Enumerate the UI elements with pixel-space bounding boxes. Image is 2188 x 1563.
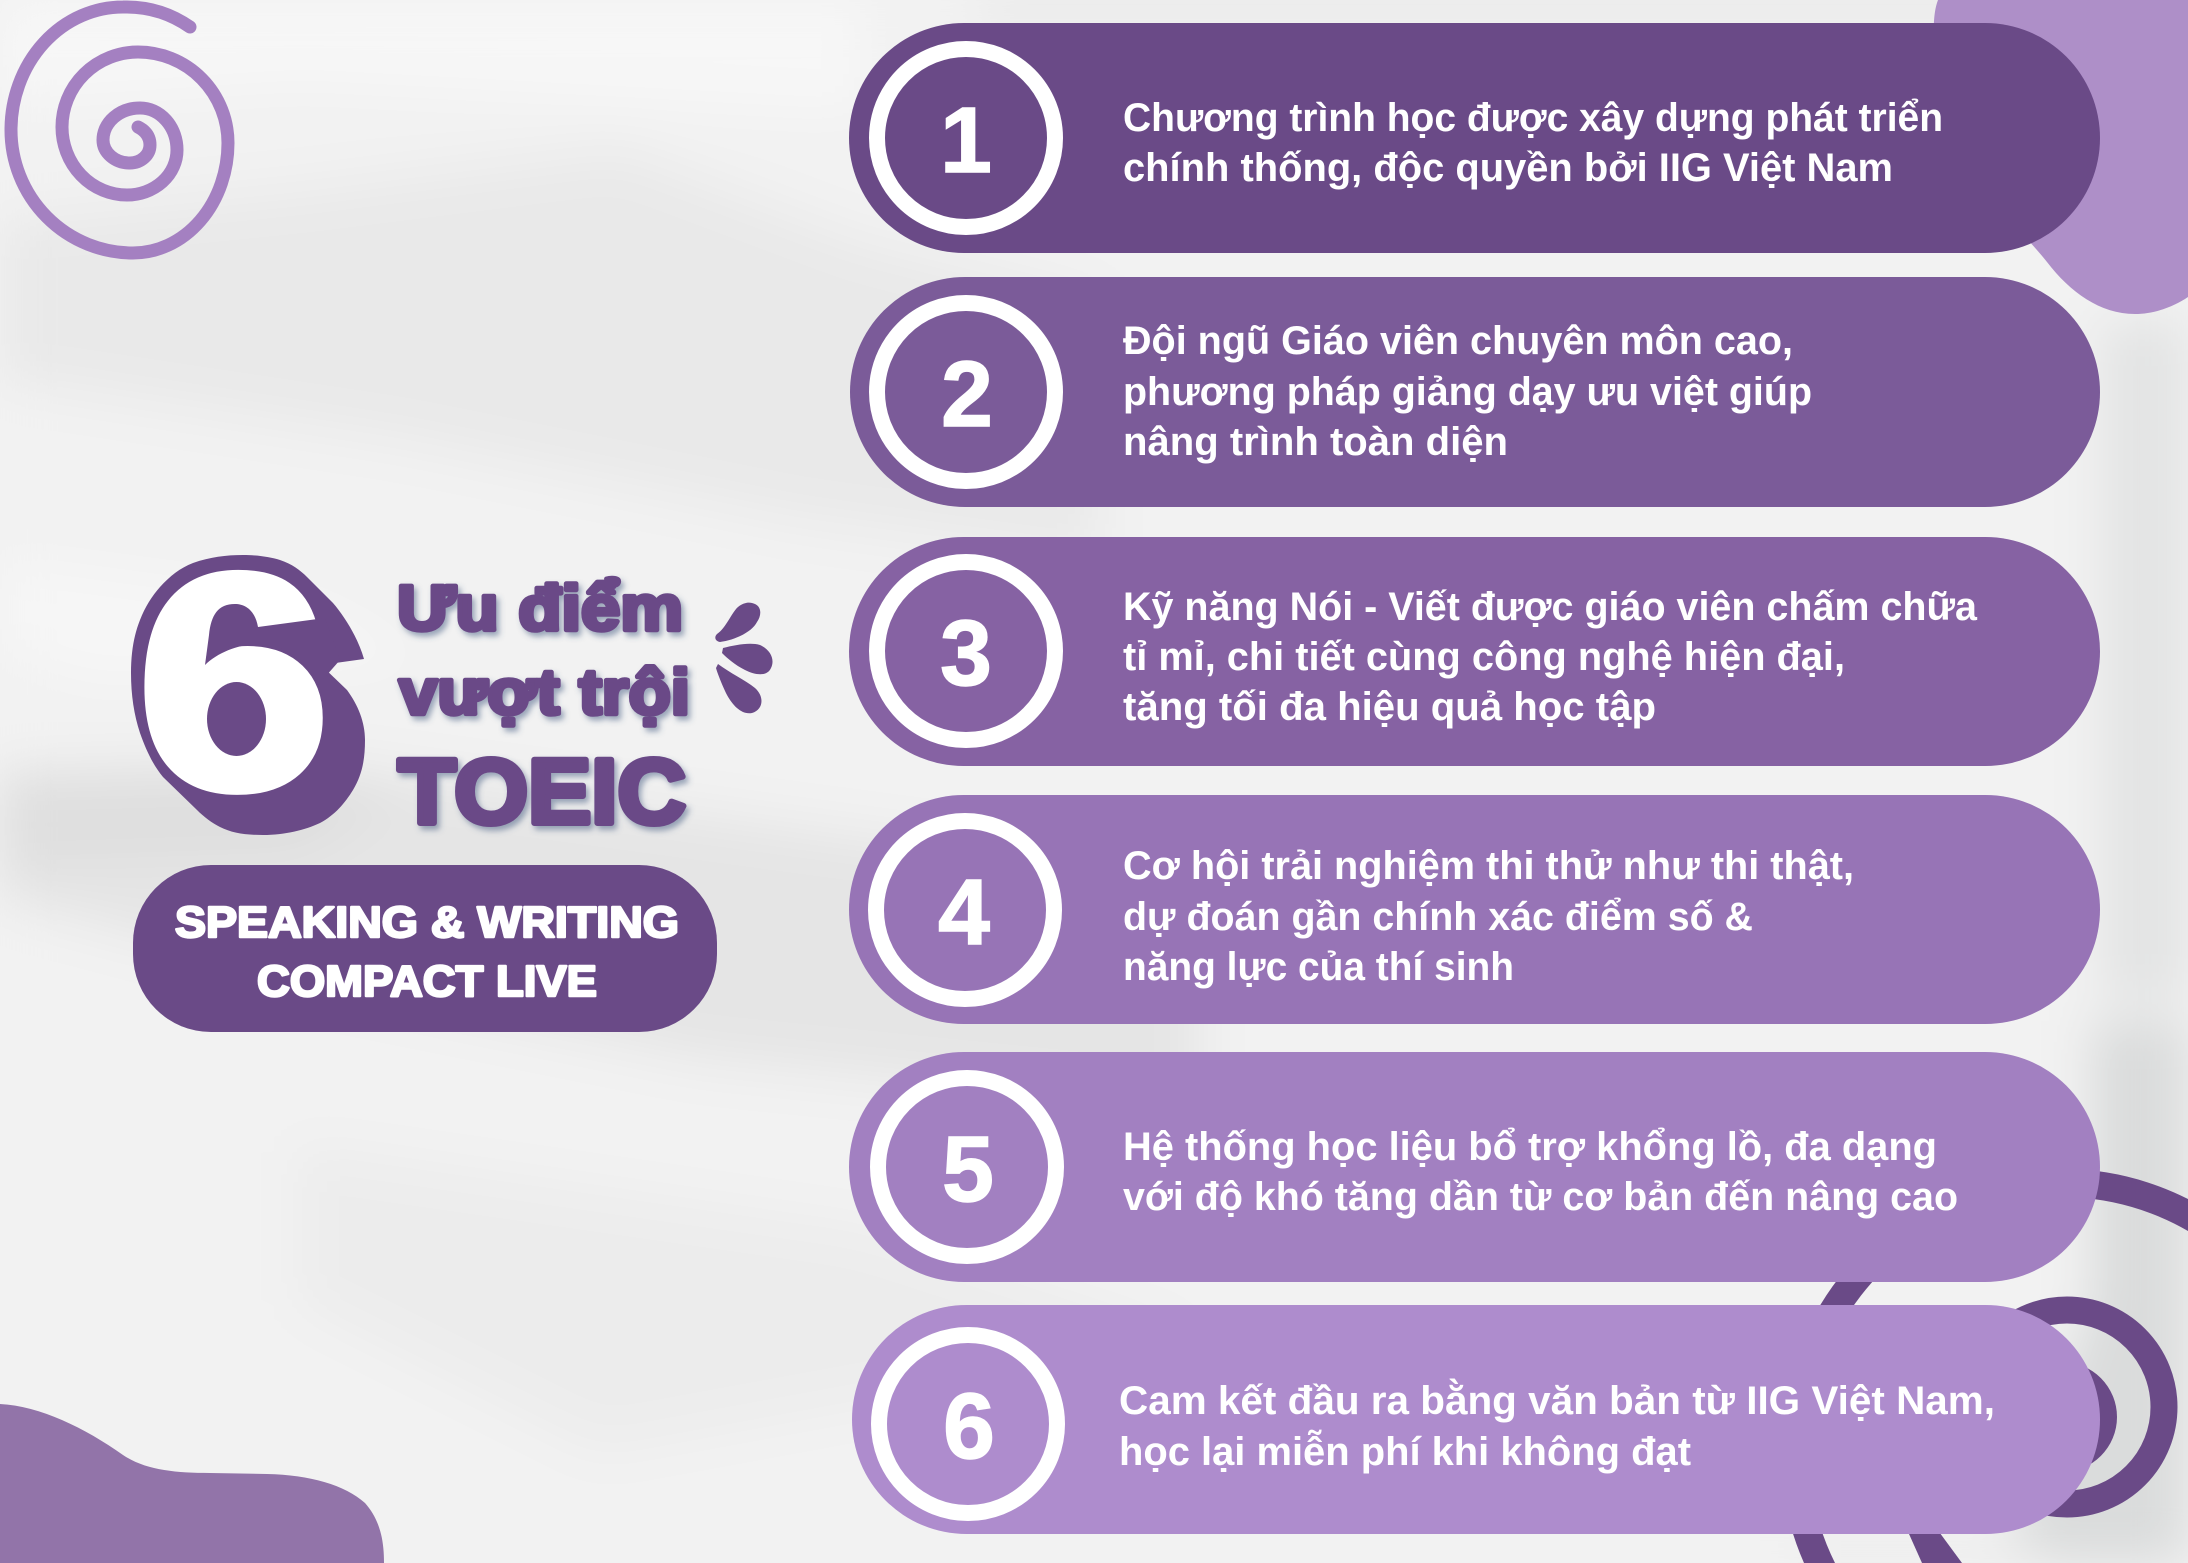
number badge 6 [879, 1335, 1057, 1513]
text 2: nâng trình toàn diện [1123, 420, 1508, 464]
panel: advantage 2 [850, 277, 2100, 507]
big number 6: 6 [140, 516, 327, 849]
text 4: năng lực của thí sinh [1123, 945, 1514, 989]
text 2: Đội ngũ Giáo viên chuyên môn cao, [1123, 319, 1793, 363]
subtitle line 2: COMPACT LIVE [257, 957, 597, 1006]
text 4 [1123, 844, 1854, 989]
number badge 6: 6 [943, 1374, 995, 1478]
panel: advantage 3 [849, 537, 2100, 766]
text 6: Cam kết đầu ra bằng văn bản từ IIG Việt Nam, [1119, 1377, 1995, 1423]
text 6 [1119, 1377, 1995, 1474]
title line: vượt trội: vượt trội [399, 656, 690, 728]
panel: advantage 4 [849, 795, 2100, 1024]
icon: droplets [715, 603, 773, 713]
text 5 [1123, 1125, 1958, 1219]
text 1 [1123, 96, 1943, 190]
text 2 [1123, 319, 1812, 464]
text 5: với độ khó tăng dần từ cơ bản đến nâng cao [1123, 1175, 1958, 1219]
text 3: tỉ mỉ, chi tiết cùng công nghệ hiện đại, [1123, 635, 1845, 679]
decoration: blob bottom-left [0, 1404, 384, 1563]
number badge 1 [877, 49, 1055, 227]
title line: TOEIC: TOEIC [398, 741, 686, 843]
number badge 3: 3 [940, 601, 992, 705]
panel: advantage 1 [849, 23, 2100, 253]
text 4: Cơ hội trải nghiệm thi thử như thi thật, [1123, 844, 1854, 888]
decoration: blob top-right [1934, 0, 2188, 314]
number badge 5 [878, 1078, 1056, 1256]
text 3: tăng tối đa hiệu quả học tập [1123, 685, 1656, 729]
text 6: học lại miễn phí khi không đạt [1119, 1428, 1691, 1474]
number badge 5: 5 [942, 1117, 994, 1221]
number badge 2 [877, 303, 1055, 481]
number badge 2: 2 [941, 342, 993, 446]
number badge 4: 4 [938, 860, 990, 964]
text 1: Chương trình học được xây dựng phát triển [1123, 96, 1943, 140]
panel: advantage 6 [852, 1305, 2100, 1534]
text 4: dự đoán gần chính xác điểm số & [1123, 895, 1753, 939]
title line: Ưu điểm: Ưu điểm [397, 572, 683, 644]
text 5: Hệ thống học liệu bổ trợ khổng lồ, đa dạng [1123, 1125, 1937, 1169]
subtitle pill [133, 865, 717, 1032]
subtitle line 1: SPEAKING & WRITING [175, 898, 679, 947]
decoration: spiral top-left [11, 7, 228, 253]
number badge 1: 1 [940, 88, 992, 192]
text 3 [1123, 585, 1978, 729]
decoration: concentric rings bottom-right [1780, 1169, 2188, 1563]
text 3: Kỹ năng Nói - Viết được giáo viên chấm chữa [1123, 585, 1978, 629]
panel: headline [131, 516, 773, 1032]
number badge 3 [877, 562, 1055, 740]
text 1: chính thống, độc quyền bởi IIG Việt Nam [1123, 146, 1893, 190]
number badge 4 [876, 821, 1054, 999]
text 2: phương pháp giảng dạy ưu việt giúp [1123, 370, 1812, 414]
panel: advantage 5 [849, 1052, 2100, 1282]
